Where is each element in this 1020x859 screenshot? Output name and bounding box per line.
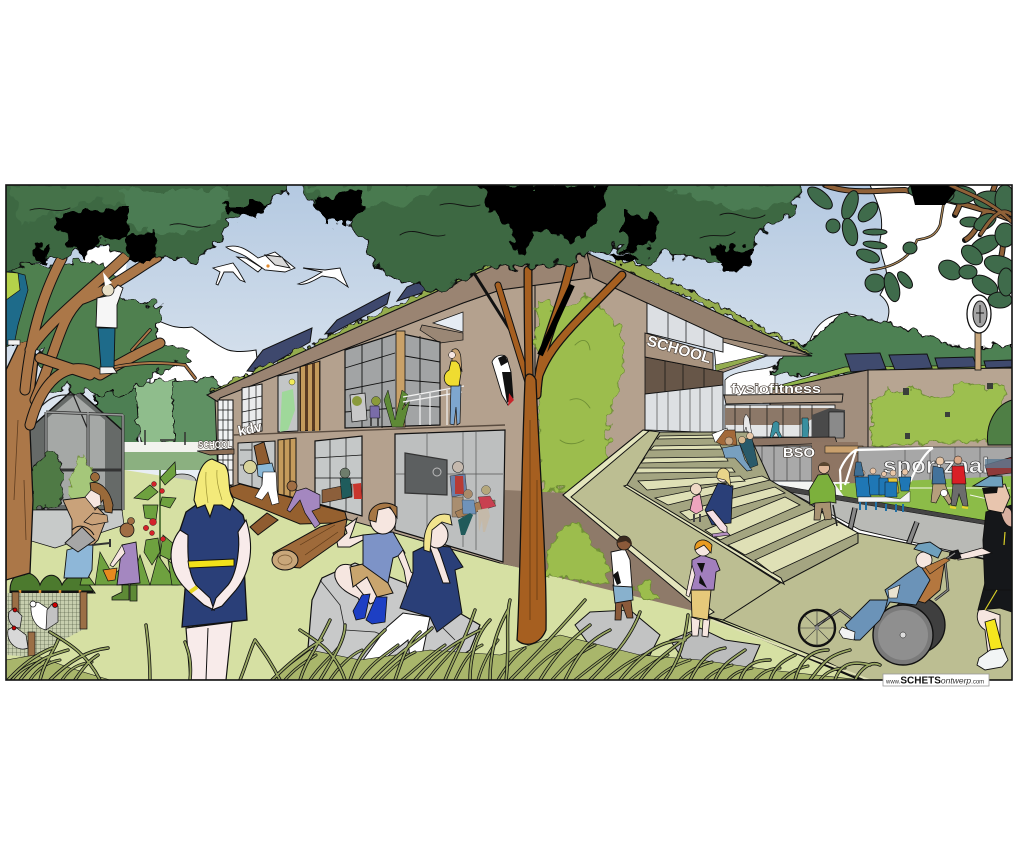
raised arm bbox=[337, 518, 363, 547]
woman in blue dress bbox=[171, 459, 251, 680]
middle tree trunk bbox=[467, 245, 622, 644]
chickens bbox=[8, 601, 58, 649]
orange bucket bbox=[103, 568, 117, 581]
watermark bbox=[883, 674, 989, 686]
fysio canopy band bbox=[724, 394, 843, 404]
ground lawn bbox=[6, 470, 885, 690]
hand on grip bbox=[949, 550, 961, 559]
background trees left bbox=[95, 378, 222, 450]
goal bbox=[840, 448, 933, 490]
plaza path bbox=[723, 533, 1012, 690]
belt bbox=[188, 559, 234, 568]
sports hall bbox=[770, 295, 1012, 450]
label: fysiofitness: fysiofitness bbox=[731, 381, 821, 396]
sky bbox=[6, 186, 888, 506]
shoe bbox=[977, 648, 1008, 670]
branches over lower canopy bbox=[25, 257, 195, 425]
teacher bbox=[450, 462, 467, 517]
label: sports text on wall: sportzaal bbox=[883, 453, 989, 478]
legs and skirt bbox=[363, 613, 430, 668]
sandals bbox=[353, 594, 370, 620]
leaves bbox=[804, 183, 1018, 308]
ramp edge along stairs bbox=[624, 485, 784, 584]
girl on rock bbox=[352, 514, 463, 680]
logs bbox=[228, 442, 347, 570]
lower left canopy bbox=[6, 262, 190, 397]
green roof strip left bbox=[207, 255, 812, 396]
group at top of stairs bbox=[712, 428, 758, 471]
green roof edge bbox=[770, 364, 986, 389]
rocks under boys bbox=[575, 610, 760, 670]
solar panels on roof bbox=[246, 283, 424, 372]
birds bbox=[213, 246, 348, 287]
wheelchair with rider bbox=[799, 542, 955, 665]
upper glass school bbox=[647, 303, 723, 352]
big upper glass bbox=[345, 331, 440, 428]
dark band under sign bbox=[645, 357, 723, 400]
shorts bbox=[350, 563, 393, 597]
soffit above balcony bbox=[420, 325, 463, 343]
children on logs bbox=[244, 460, 320, 528]
ramp with edges bbox=[563, 430, 780, 620]
ground floor big glass bbox=[395, 430, 505, 562]
low retaining wall top bbox=[792, 492, 984, 558]
head with cap bbox=[983, 484, 1010, 513]
kid in tree bbox=[96, 272, 123, 374]
label: SCHOOL left: SCHOOL bbox=[198, 439, 232, 451]
white strip bbox=[776, 482, 850, 492]
BSO brown wall bbox=[812, 442, 858, 484]
arm bbox=[957, 548, 992, 560]
school sign band bbox=[645, 333, 713, 370]
brown wall fysio wing bbox=[770, 370, 868, 450]
canopy contour lines bbox=[30, 204, 765, 238]
watering can bbox=[65, 526, 110, 552]
near leg bbox=[352, 568, 380, 604]
clouds bbox=[82, 185, 1012, 400]
ivy on hall bbox=[872, 382, 1005, 446]
wall under ramp bbox=[500, 490, 715, 620]
watermark text: www.SCHETSontwerp.com bbox=[885, 676, 984, 686]
chicken coop bbox=[7, 592, 87, 662]
far left window bbox=[218, 400, 233, 485]
arm to mouth bbox=[427, 541, 450, 583]
front wheel bbox=[799, 610, 835, 646]
red car bbox=[985, 457, 1012, 476]
illustration scene bbox=[0, 180, 1018, 690]
head bbox=[370, 506, 396, 534]
right arm bbox=[398, 550, 418, 587]
gardener woman bbox=[63, 472, 113, 578]
roof soffit right bbox=[587, 253, 812, 356]
top left canopy bbox=[0, 180, 287, 275]
ground floor window middle bbox=[315, 436, 362, 516]
head with cap bbox=[916, 552, 932, 568]
label: kdv: kdv bbox=[236, 418, 263, 439]
top right tree bbox=[804, 183, 1018, 308]
child in purple dress bbox=[103, 518, 140, 601]
image frame bbox=[6, 185, 1012, 680]
middle canopy bbox=[296, 180, 808, 290]
ivy on wall bbox=[536, 295, 625, 500]
left bird bbox=[213, 263, 245, 285]
vents on hall bbox=[903, 383, 993, 439]
right bird bbox=[298, 268, 348, 287]
distant field and hedge bbox=[124, 430, 217, 482]
black shorts and top bbox=[978, 583, 1012, 612]
upper window 3 with green bbox=[278, 372, 298, 432]
grey posts bbox=[850, 508, 917, 548]
pink shoe bbox=[352, 660, 374, 680]
left tree branches bbox=[6, 330, 38, 580]
upper window 2 bbox=[242, 384, 262, 435]
arms bbox=[171, 530, 214, 610]
BSO wall panels bbox=[752, 446, 812, 481]
hall lower grey wall bbox=[858, 446, 1012, 482]
pupils inside bbox=[322, 468, 362, 503]
left wall bbox=[215, 270, 535, 570]
right wall bbox=[536, 270, 647, 494]
seated pupils bbox=[455, 486, 496, 535]
stair treads bbox=[635, 435, 858, 573]
painter at easel bbox=[350, 393, 380, 426]
blackboard bbox=[405, 453, 447, 495]
plant bbox=[384, 390, 410, 427]
stair block dark risers bbox=[627, 432, 858, 583]
wood slats bbox=[300, 361, 320, 431]
torso bbox=[885, 565, 930, 610]
branches bbox=[825, 185, 1012, 260]
brown awning bbox=[197, 449, 234, 455]
label: SCHOOL on sign: SCHOOL bbox=[645, 333, 713, 367]
sign on pole bbox=[967, 295, 991, 370]
bracelet bbox=[190, 587, 197, 592]
big rock bbox=[307, 563, 480, 672]
ground floor door bbox=[238, 438, 296, 498]
solar panels right bbox=[845, 353, 1012, 372]
greenhouse bbox=[28, 388, 124, 548]
legs bbox=[977, 608, 1000, 655]
dress bbox=[180, 503, 247, 627]
woodpecker bbox=[492, 355, 514, 406]
shrubs at wall bbox=[547, 524, 658, 600]
fysio and BSO block bbox=[724, 381, 863, 490]
second kid at left edge bbox=[6, 270, 28, 345]
foreground grass base bbox=[6, 635, 880, 682]
backrest bbox=[914, 560, 945, 603]
head bbox=[426, 522, 448, 548]
small tree at right bbox=[987, 400, 1012, 445]
floor slab line bbox=[233, 425, 505, 435]
pregnant woman on balcony bbox=[444, 349, 462, 425]
shirt bbox=[363, 532, 405, 583]
woman and child on stairs bbox=[690, 468, 733, 537]
main building bbox=[197, 253, 812, 620]
interior bbox=[725, 405, 835, 437]
beige hall wall bbox=[868, 368, 1012, 450]
man in green jacket bbox=[809, 462, 837, 526]
vegetable and tomato plants bbox=[80, 462, 195, 585]
navy shirt bbox=[400, 545, 463, 632]
back wheels bbox=[889, 597, 945, 653]
field bbox=[835, 476, 1012, 520]
foreground grass blades bbox=[8, 600, 880, 680]
big bird bbox=[226, 246, 295, 272]
hair bbox=[194, 459, 234, 517]
lower glass school bbox=[645, 385, 723, 433]
far leg bbox=[335, 564, 370, 605]
runner pushing wheelchair bbox=[949, 476, 1012, 670]
frame bbox=[815, 553, 955, 627]
roof fascia left bbox=[207, 253, 590, 402]
fysio people bbox=[743, 414, 809, 438]
roof opening bbox=[714, 342, 767, 368]
BSO upper band bbox=[750, 437, 837, 446]
boy with white shirt on rock bbox=[611, 536, 633, 620]
rider legs bbox=[845, 600, 890, 640]
sports field bbox=[775, 447, 1012, 565]
hill of trees behind sports hall bbox=[770, 312, 1012, 375]
soccer team bbox=[854, 462, 911, 512]
legs bbox=[186, 622, 232, 680]
boy on rock bbox=[335, 503, 418, 624]
adult players bbox=[931, 456, 968, 508]
label: BSO: BSO bbox=[783, 445, 815, 460]
ramp and stairs bbox=[563, 430, 1012, 690]
balcony rail bbox=[403, 386, 464, 425]
raised vegetable row bbox=[10, 573, 95, 595]
boy with purple shirt bbox=[686, 540, 720, 637]
